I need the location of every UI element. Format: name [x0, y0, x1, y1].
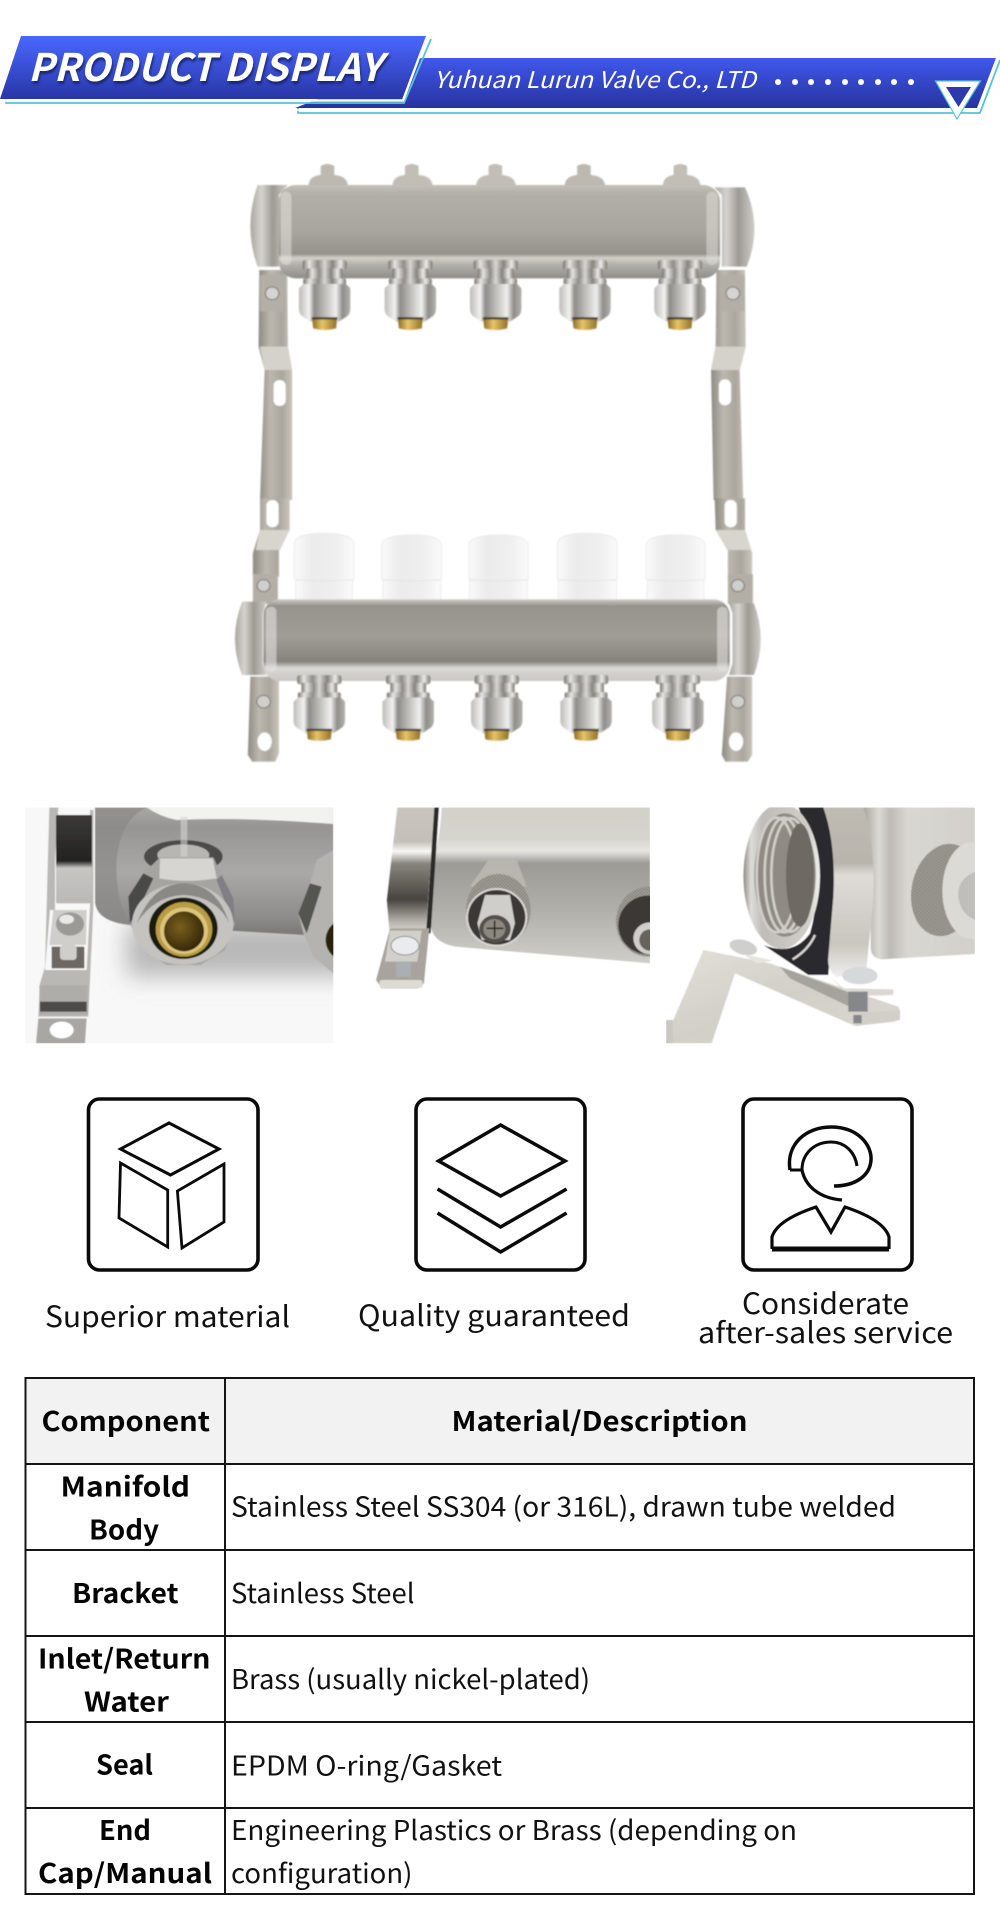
lower manifold body: [235, 599, 761, 681]
left screw: [729, 939, 758, 956]
bracket foot with hole: [36, 1018, 87, 1043]
upper nubs: [309, 164, 700, 185]
header row: Material/Description: [452, 1400, 748, 1439]
row: manifold body: [60, 1466, 896, 1548]
row: end cap/manual: configuration): [231, 1852, 412, 1891]
icon: down triangle: [936, 81, 980, 119]
upper tab: [833, 980, 894, 996]
bracket plate: [376, 928, 429, 988]
row: manifold body: Stainless Steel SS304 (or 316L), drawn tube welded: [231, 1486, 896, 1524]
end fitting right: [715, 187, 754, 267]
company banner: [295, 58, 1000, 113]
row: seal: Seal: [96, 1744, 153, 1782]
row: inlet/return water: Inlet/Return: [38, 1638, 211, 1676]
table header fill: [26, 1378, 974, 1464]
row: manifold body: Body: [89, 1508, 160, 1548]
header row: [42, 1400, 748, 1439]
upper manifold body: [250, 185, 754, 278]
header banner: [0, 36, 1000, 119]
label: Superior material: [45, 1294, 290, 1336]
bracket band: [387, 807, 434, 930]
title banner: [0, 36, 431, 104]
lower brackets: [248, 498, 753, 762]
label: Quality guaranteed: [358, 1293, 630, 1335]
end fitting left: [250, 185, 288, 267]
label line two: after-sales service: [698, 1310, 953, 1352]
lower compression fittings: [294, 675, 704, 741]
feature: after-sales service: [742, 1099, 912, 1323]
row: bracket: [72, 1572, 414, 1611]
table grid: [26, 1378, 974, 1894]
end fitting right: [729, 603, 761, 675]
upper brackets: [259, 270, 746, 500]
row: manifold body: Manifold: [60, 1466, 190, 1504]
company name: Yuhuan Lurun Valve Co., LTD: [434, 61, 758, 95]
threaded opening: [743, 803, 820, 949]
bracket band: [823, 807, 874, 977]
detail photo: thermostat port: [376, 807, 650, 989]
row: seal: EPDM O-ring/Gasket: [231, 1744, 502, 1784]
row: end cap/manual: [38, 1809, 797, 1891]
specification table: [26, 1378, 974, 1894]
feature: quality guaranteed: [358, 1099, 630, 1335]
row: seal: [96, 1744, 502, 1784]
upper compression fittings: [299, 260, 706, 330]
icon: layers: [416, 1099, 585, 1270]
row: inlet/return water: Water: [84, 1680, 169, 1720]
row: inlet/return water: Brass (usually nickel-plated): [231, 1658, 590, 1697]
second fitting: [298, 850, 333, 973]
port 2: [616, 886, 650, 958]
title: PRODUCT DISPLAY: [28, 37, 390, 92]
bracket strip: [38, 807, 93, 1017]
black gasket: [763, 807, 834, 975]
label: Considerate: [742, 1281, 909, 1323]
right screw: [848, 992, 868, 1012]
dots row: [775, 79, 914, 85]
row: end cap/manual: End: [99, 1809, 151, 1848]
detail photo: brass fitting: [35, 807, 334, 1044]
manifold body: [863, 807, 975, 959]
header row: Component: [42, 1400, 210, 1439]
fitting nut: [144, 840, 224, 866]
row: end cap/manual: Cap/Manual: [38, 1852, 212, 1891]
knurled nut: [910, 843, 960, 937]
manifold body: [431, 807, 650, 963]
feature: superior material: [45, 1099, 290, 1336]
product photo: manifold: [235, 164, 761, 762]
row: end cap/manual: Engineering Plastics or Brass (depending on: [231, 1809, 797, 1848]
brass insert: [156, 902, 212, 957]
icon: cube: [88, 1099, 258, 1270]
base plate and leg: [667, 950, 900, 1043]
white handwheels: [294, 533, 705, 600]
detail photo: threaded end and bracket: [666, 803, 1000, 1043]
screw: [49, 910, 87, 945]
row: bracket: Stainless Steel: [231, 1572, 414, 1611]
row: inlet/return water: [38, 1638, 590, 1720]
icon: headset agent: [743, 1099, 912, 1270]
end fitting left: [235, 602, 266, 675]
manifold body: [95, 807, 333, 937]
port 1: [470, 860, 527, 887]
shadow under body: [127, 923, 353, 977]
row: bracket: Bracket: [72, 1572, 178, 1611]
